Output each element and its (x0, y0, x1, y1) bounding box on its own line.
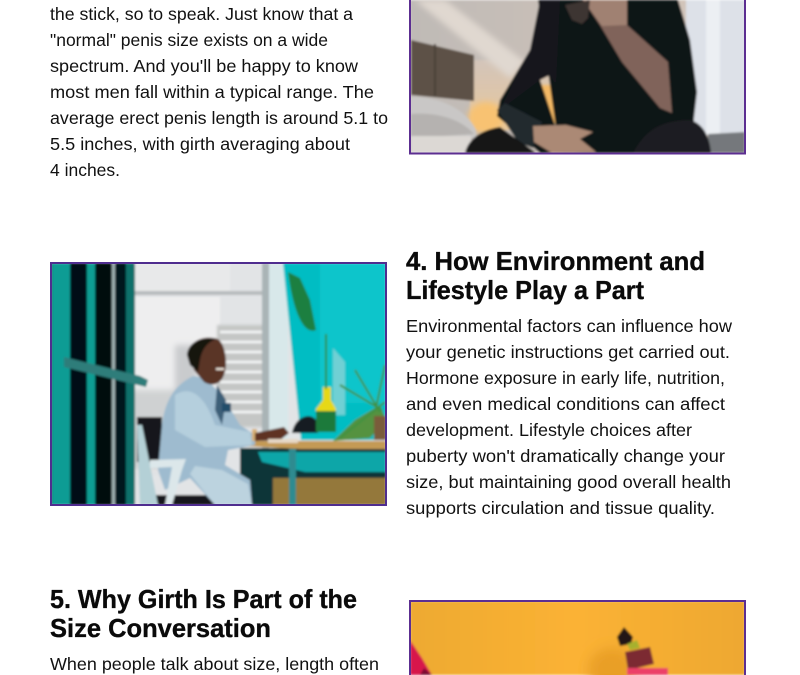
text block: section 4 paragraph (406, 316, 732, 518)
text block: section 4 paragraph: Environmental factors can influence how (406, 316, 732, 336)
text block: section 4 paragraph: development. Lifestyle choices after (406, 420, 692, 440)
text block: section 4 paragraph: Hormone exposure in early life, nutrition, (406, 368, 725, 388)
photo: smiling man in light suit at desk in teal office (51, 263, 386, 505)
text block: section 4 paragraph: your genetic instructions get carried out. (406, 342, 730, 362)
text block: section 3 closing paragraph: "normal" penis size exists on a wide (50, 30, 328, 50)
photo: man on bed with hand on face (410, 0, 746, 154)
text block: section 3 closing paragraph: most men fall within a typical range. The (50, 82, 374, 102)
heading: section 5 (50, 584, 357, 643)
text block: section 5 paragraph start: When people talk about size, length often (50, 654, 379, 674)
heading: section 4 (406, 246, 705, 305)
text block: section 4 paragraph: and even medical conditions can affect (406, 394, 725, 414)
text block: section 3 closing paragraph: the stick, so to speak. Just know that a (50, 4, 353, 24)
heading: section 5: 5. Why Girth Is Part of the (50, 584, 357, 614)
text block: section 3 closing paragraph: average erect penis length is around 5.1 to (50, 108, 388, 128)
text block: section 3 closing paragraph: 4 inches. (50, 160, 120, 180)
text block: section 4 paragraph: size, but maintaining good overall health (406, 472, 731, 492)
text block: section 4 paragraph: supports circulation and tissue quality. (406, 498, 715, 518)
text block: section 4 paragraph: puberty won't dramatically change your (406, 446, 725, 466)
text block: section 3 closing paragraph: 5.5 inches, with girth averaging about (50, 134, 350, 154)
heading: section 4: 4. How Environment and (406, 246, 705, 276)
heading: section 5: Size Conversation (50, 613, 271, 643)
text block: section 3 closing paragraph (50, 4, 388, 180)
text block: section 3 closing paragraph: spectrum. And you'll be happy to know (50, 56, 358, 76)
photo: measuring tape and fruit on orange background (410, 601, 745, 675)
heading: section 4: Lifestyle Play a Part (406, 275, 644, 305)
